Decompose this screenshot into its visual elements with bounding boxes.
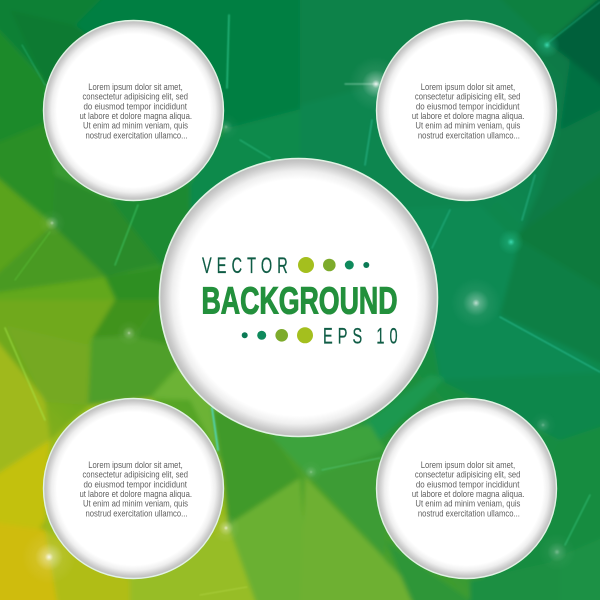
text block: top left: nostrud exercitation ullamco... (86, 130, 188, 140)
dots: lower row (242, 327, 313, 343)
text block: top left: Lorem ipsum dolor sit amet, (88, 82, 183, 92)
text block: top right: nostrud exercitation ullamco... (418, 130, 520, 140)
text block: top left: consectetur adipisicing elit, sed (82, 92, 188, 102)
text block: top left: Ut enim ad minim veniam, quis (83, 121, 188, 131)
text block: top right (412, 82, 524, 140)
text block: bottom right: nostrud exercitation ullamco... (418, 508, 520, 518)
text block: top right: Ut enim ad minim veniam, quis (415, 121, 521, 131)
dots: upper row (298, 257, 369, 273)
text block: bottom left: Ut enim ad minim veniam, quis (83, 499, 188, 509)
heading: BACKGROUND: BACKGROUND (202, 281, 398, 323)
text block: bottom right: consectetur adipisicing elit, sed (415, 470, 520, 480)
heading: VECTOR: VECTOR (202, 253, 288, 278)
text block: top left: ut labore et dolore magna aliqua. (80, 111, 192, 121)
text block: bottom right: ut labore et dolore magna aliqua. (412, 489, 524, 499)
text block: bottom right (412, 460, 524, 518)
panel: bottom left circle (44, 398, 224, 578)
text block: top left: do eiusmod tempor incididunt (84, 101, 187, 111)
panel: top left circle (44, 20, 224, 200)
text block: bottom left: ut labore et dolore magna aliqua. (80, 489, 192, 499)
text block: bottom right: Ut enim ad minim veniam, quis (415, 499, 521, 509)
text block: top right: ut labore et dolore magna aliqua. (412, 111, 524, 121)
panel: central circle (160, 158, 438, 436)
text block: top left (80, 82, 192, 140)
text block: bottom left: do eiusmod tempor incididunt (84, 479, 187, 489)
text block: bottom right: do eiusmod tempor incididunt (416, 479, 520, 489)
text block: top right: consectetur adipisicing elit, sed (415, 92, 520, 102)
text block: bottom left: consectetur adipisicing elit, sed (82, 470, 188, 480)
text block: top right: Lorem ipsum dolor sit amet, (421, 82, 515, 92)
text block: top right: do eiusmod tempor incididunt (416, 101, 520, 111)
text block: bottom left: nostrud exercitation ullamco... (86, 508, 188, 518)
panel: bottom right circle (376, 398, 556, 578)
text block: bottom left (80, 460, 192, 518)
panel: top right circle (376, 20, 556, 200)
heading: EPS 10: EPS 10 (323, 323, 398, 348)
text block: bottom right: Lorem ipsum dolor sit amet, (421, 460, 515, 470)
text block: bottom left: Lorem ipsum dolor sit amet, (88, 460, 183, 470)
